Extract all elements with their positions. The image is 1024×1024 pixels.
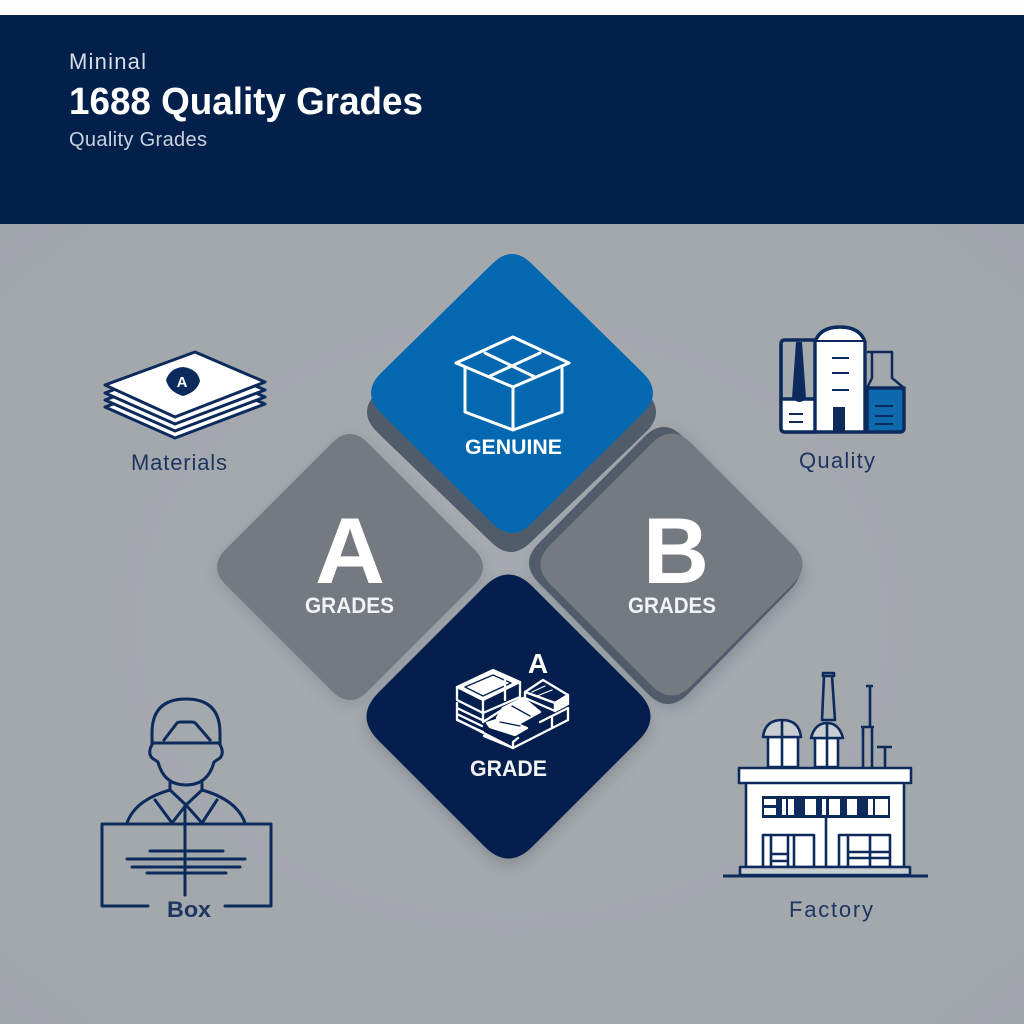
page background	[0, 224, 1024, 1024]
label: grades: GRADES	[628, 593, 716, 618]
label: box: Box	[167, 897, 212, 922]
label: factory: Factory	[789, 897, 873, 922]
label: grade: GRADE	[470, 756, 547, 781]
icon: person with box	[102, 699, 271, 906]
letter B: B	[643, 498, 709, 603]
panel: genuine	[367, 254, 656, 552]
header eyebrow: Mininal	[69, 49, 146, 74]
label: grades: GRADES	[305, 593, 394, 618]
title: 1688 Quality Grades	[69, 81, 423, 123]
label: quality: Quality	[799, 448, 875, 473]
icon: quality lab	[781, 327, 904, 432]
panel: grade A	[217, 434, 483, 704]
letter A: A	[528, 648, 548, 679]
label: materials: Materials	[131, 450, 227, 475]
letter A: A	[315, 498, 385, 603]
icon: graded goods stack	[457, 670, 568, 748]
subtitle: Quality Grades	[69, 129, 207, 151]
icon: factory	[723, 673, 928, 876]
panel: grade	[366, 574, 650, 864]
icon: materials stack	[105, 352, 265, 438]
header band	[0, 0, 1024, 224]
icon: open box	[456, 337, 569, 430]
panel: grade B	[529, 427, 803, 708]
label: genuine: GENUINE	[465, 436, 562, 459]
icon: materials stack: A	[177, 374, 188, 391]
